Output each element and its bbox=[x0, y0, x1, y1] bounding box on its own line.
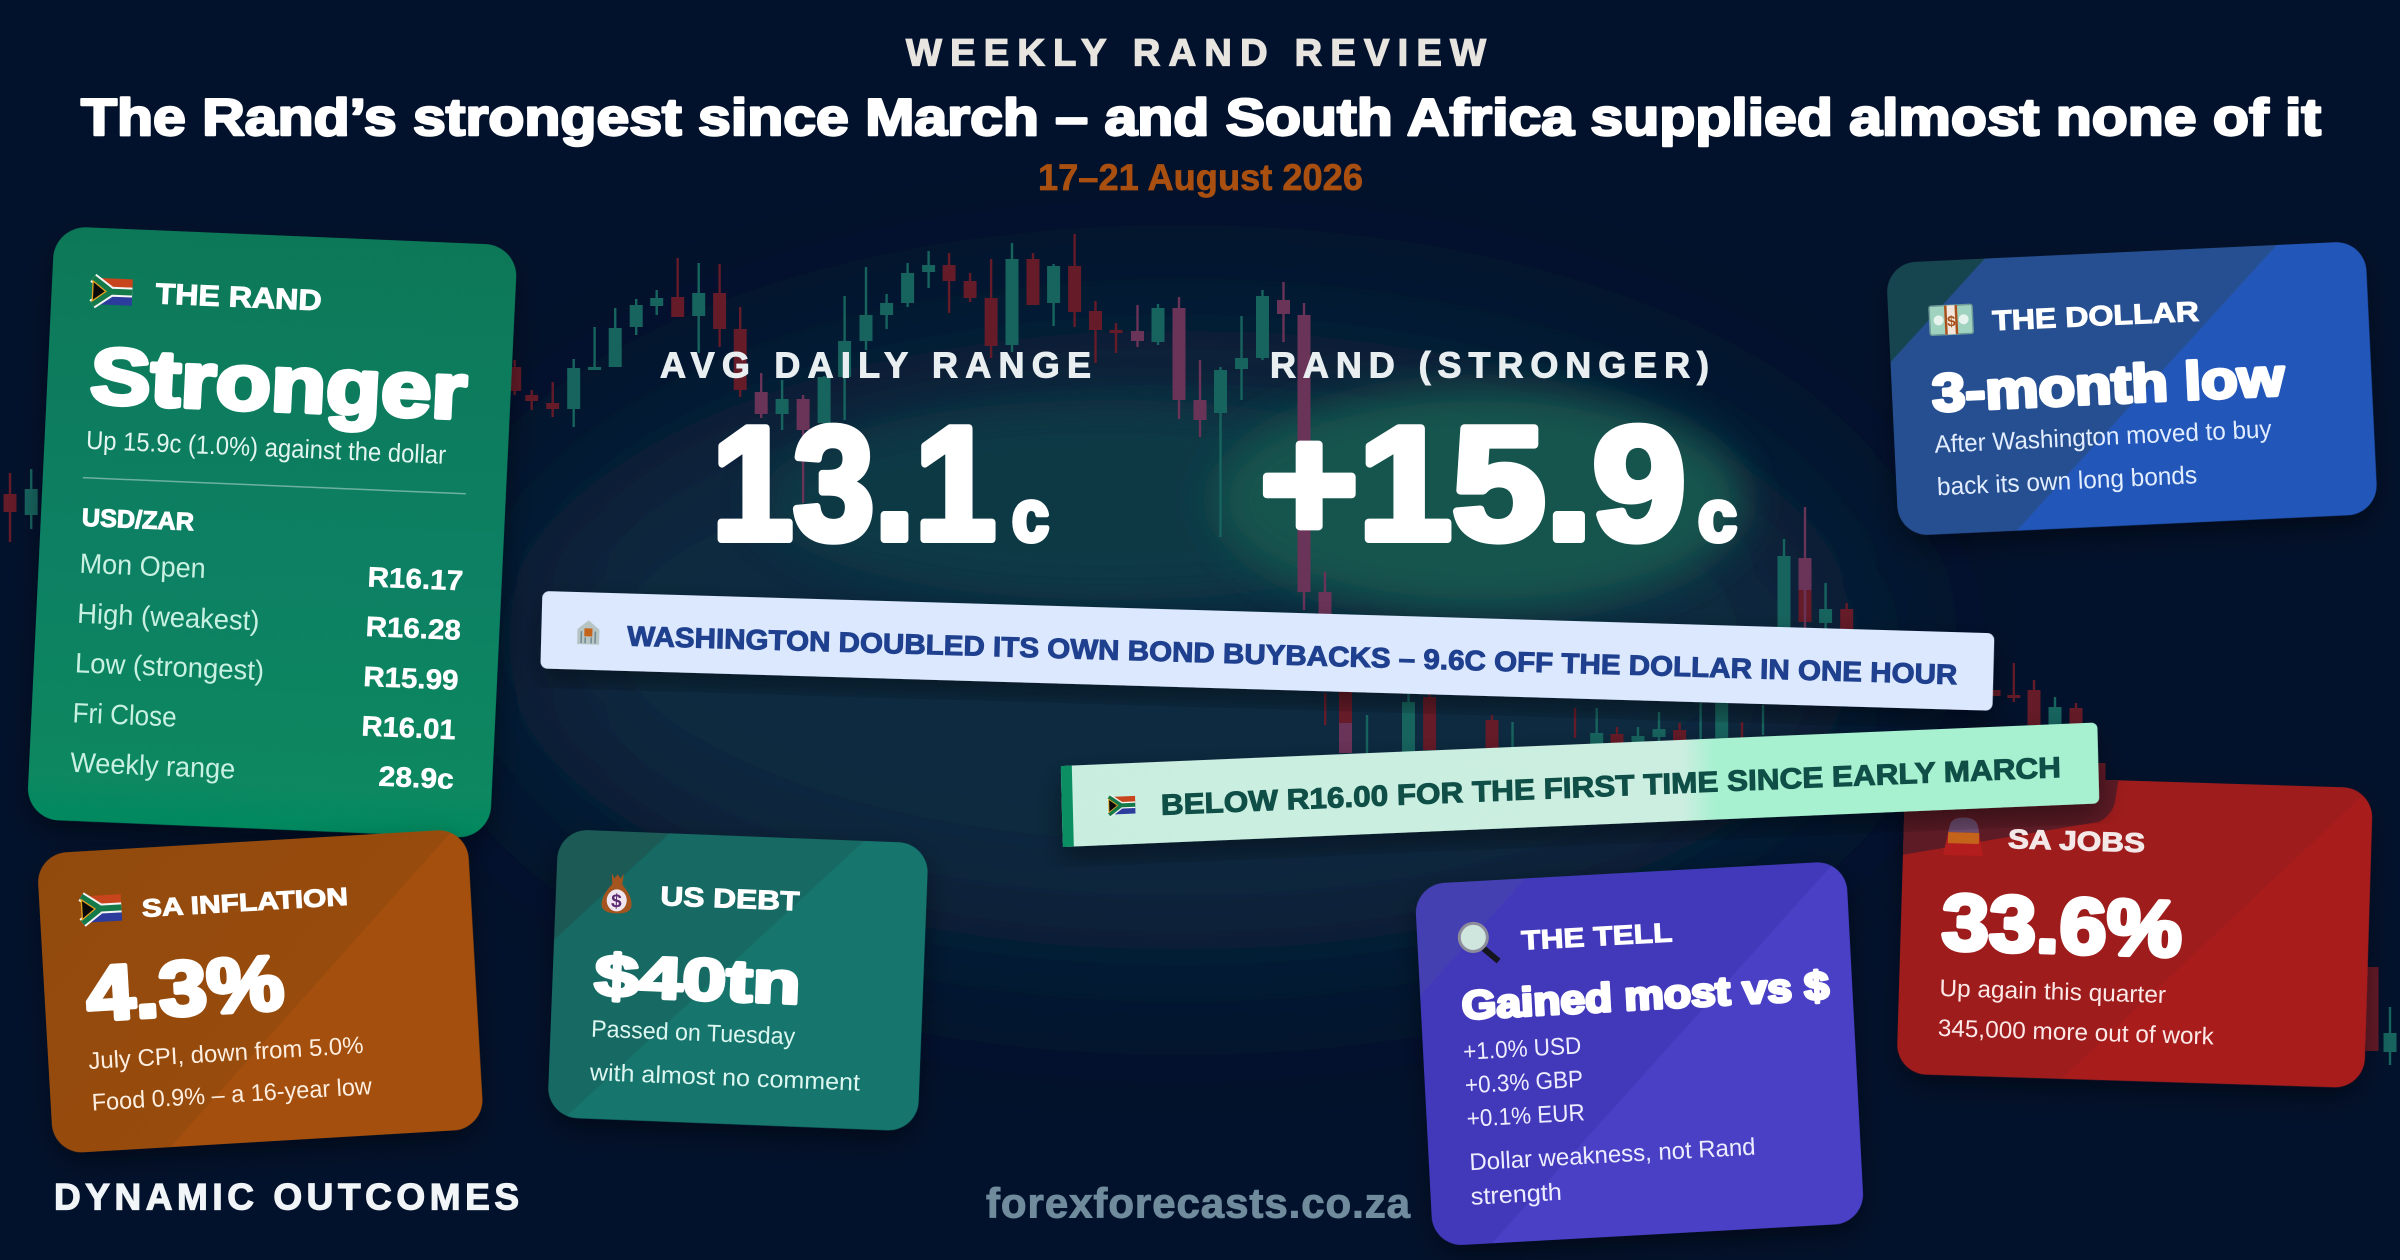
headline: Stronger bbox=[89, 331, 469, 436]
title: The Rand’s strongest since March – and South Africa supplied almost none of it bbox=[81, 89, 2321, 147]
subtext: After Washington moved to buy bbox=[1934, 415, 2273, 459]
stat: rand stronger bbox=[1260, 344, 1737, 574]
panel: the rand bbox=[27, 226, 518, 838]
card label: SA JOBS bbox=[2008, 824, 2145, 858]
panel: the tell: strength bbox=[1470, 1179, 1562, 1211]
footer url: forexforecasts.co.za bbox=[986, 1180, 1411, 1226]
kicker: WEEKLY RAND REVIEW bbox=[906, 32, 1486, 74]
date: 17–21 August 2026 bbox=[1038, 157, 1363, 198]
icon: magnifying glass bbox=[1459, 922, 1499, 963]
banner text: BELOW R16.00 FOR THE FIRST TIME SINCE EARLY MARCH bbox=[1161, 752, 2061, 822]
panel: the tell bbox=[1414, 861, 1865, 1246]
panel: SA jobs: 345,000 more out of work bbox=[1937, 1015, 2215, 1051]
unit: c bbox=[1012, 477, 1049, 557]
currency list: +1.0% USD bbox=[1463, 1032, 1582, 1066]
table rows: 28.9c bbox=[378, 761, 454, 795]
banner: below R16.00 bbox=[1061, 722, 2099, 847]
panel: US debt bbox=[547, 829, 929, 1131]
value: $40tn bbox=[593, 943, 802, 1017]
icon: jobs marker bbox=[1943, 817, 1984, 856]
table rows: High (weakest) bbox=[77, 598, 260, 636]
table rows: Weekly range bbox=[70, 747, 236, 785]
icon: government building bbox=[577, 620, 600, 645]
table rows: R16.28 bbox=[365, 611, 462, 646]
stat: average daily range bbox=[660, 344, 1091, 574]
card label: THE DOLLAR bbox=[1992, 296, 2200, 336]
icon: SA flag bbox=[81, 894, 122, 923]
panel: SA inflation bbox=[36, 829, 484, 1154]
panel: the dollar bbox=[1886, 241, 2378, 536]
table rows: Mon Open bbox=[79, 548, 206, 584]
value: +15.9 bbox=[1260, 394, 1686, 574]
headline: Gained most vs $ bbox=[1461, 964, 1830, 1028]
card label: THE RAND bbox=[155, 278, 322, 317]
value: 33.6% bbox=[1941, 877, 2183, 973]
subtext: July CPI, down from 5.0% bbox=[88, 1032, 364, 1075]
subtext: Up again this quarter bbox=[1939, 975, 2166, 1009]
currency list: +0.3% GBP bbox=[1464, 1066, 1584, 1099]
table heading: USD/ZAR bbox=[81, 504, 195, 536]
card label: SA INFLATION bbox=[141, 883, 349, 923]
takeaway: Dollar weakness, not Rand bbox=[1469, 1134, 1756, 1176]
value: 13.1 bbox=[712, 394, 996, 574]
value: 4.3% bbox=[84, 940, 286, 1037]
table rows: Fri Close bbox=[72, 697, 177, 733]
label: RAND (STRONGER) bbox=[1270, 344, 1709, 386]
panel: SA inflation: Food 0.9% – a 16-year low bbox=[91, 1073, 373, 1117]
icon: money bag: $ bbox=[611, 891, 623, 913]
panel: US debt: with almost no comment bbox=[588, 1059, 861, 1097]
candlestick chart bbox=[4, 234, 2396, 1065]
currency list bbox=[1463, 1032, 1585, 1133]
label: AVG DAILY RANGE bbox=[660, 344, 1091, 386]
table rows bbox=[70, 548, 464, 795]
icon: banknote bbox=[1929, 304, 1973, 335]
subtext: Up 15.9c (1.0%) against the dollar bbox=[85, 425, 447, 470]
icon: banknote: $ bbox=[1947, 313, 1957, 330]
table rows: R16.01 bbox=[361, 710, 456, 745]
card label: THE TELL bbox=[1521, 918, 1673, 956]
unit: c bbox=[1698, 477, 1737, 557]
banner text: WASHINGTON DOUBLED ITS OWN BOND BUYBACKS – 9.6C OFF THE DOLLAR IN ONE HOUR bbox=[627, 621, 1958, 690]
icon: SA flag bbox=[1109, 796, 1135, 815]
brand: Dynamic Outcomes: DYNAMIC OUTCOMES bbox=[54, 1176, 519, 1218]
subtext: Passed on Tuesday bbox=[591, 1016, 796, 1051]
currency list: +0.1% EUR bbox=[1466, 1099, 1585, 1133]
card label: US DEBT bbox=[660, 881, 801, 917]
panel: the dollar: back its own long bonds bbox=[1936, 461, 2198, 501]
icon: money bag bbox=[601, 873, 633, 914]
headline: 3-month low bbox=[1931, 348, 2286, 423]
title block bbox=[81, 32, 2321, 198]
table rows: Low (strongest) bbox=[74, 647, 265, 686]
table rows: R16.17 bbox=[367, 561, 464, 596]
icon: SA flag bbox=[92, 278, 133, 306]
panel: SA jobs bbox=[1896, 774, 2373, 1088]
banner: Washington buybacks bbox=[540, 591, 1994, 711]
table rows: R15.99 bbox=[363, 661, 459, 696]
